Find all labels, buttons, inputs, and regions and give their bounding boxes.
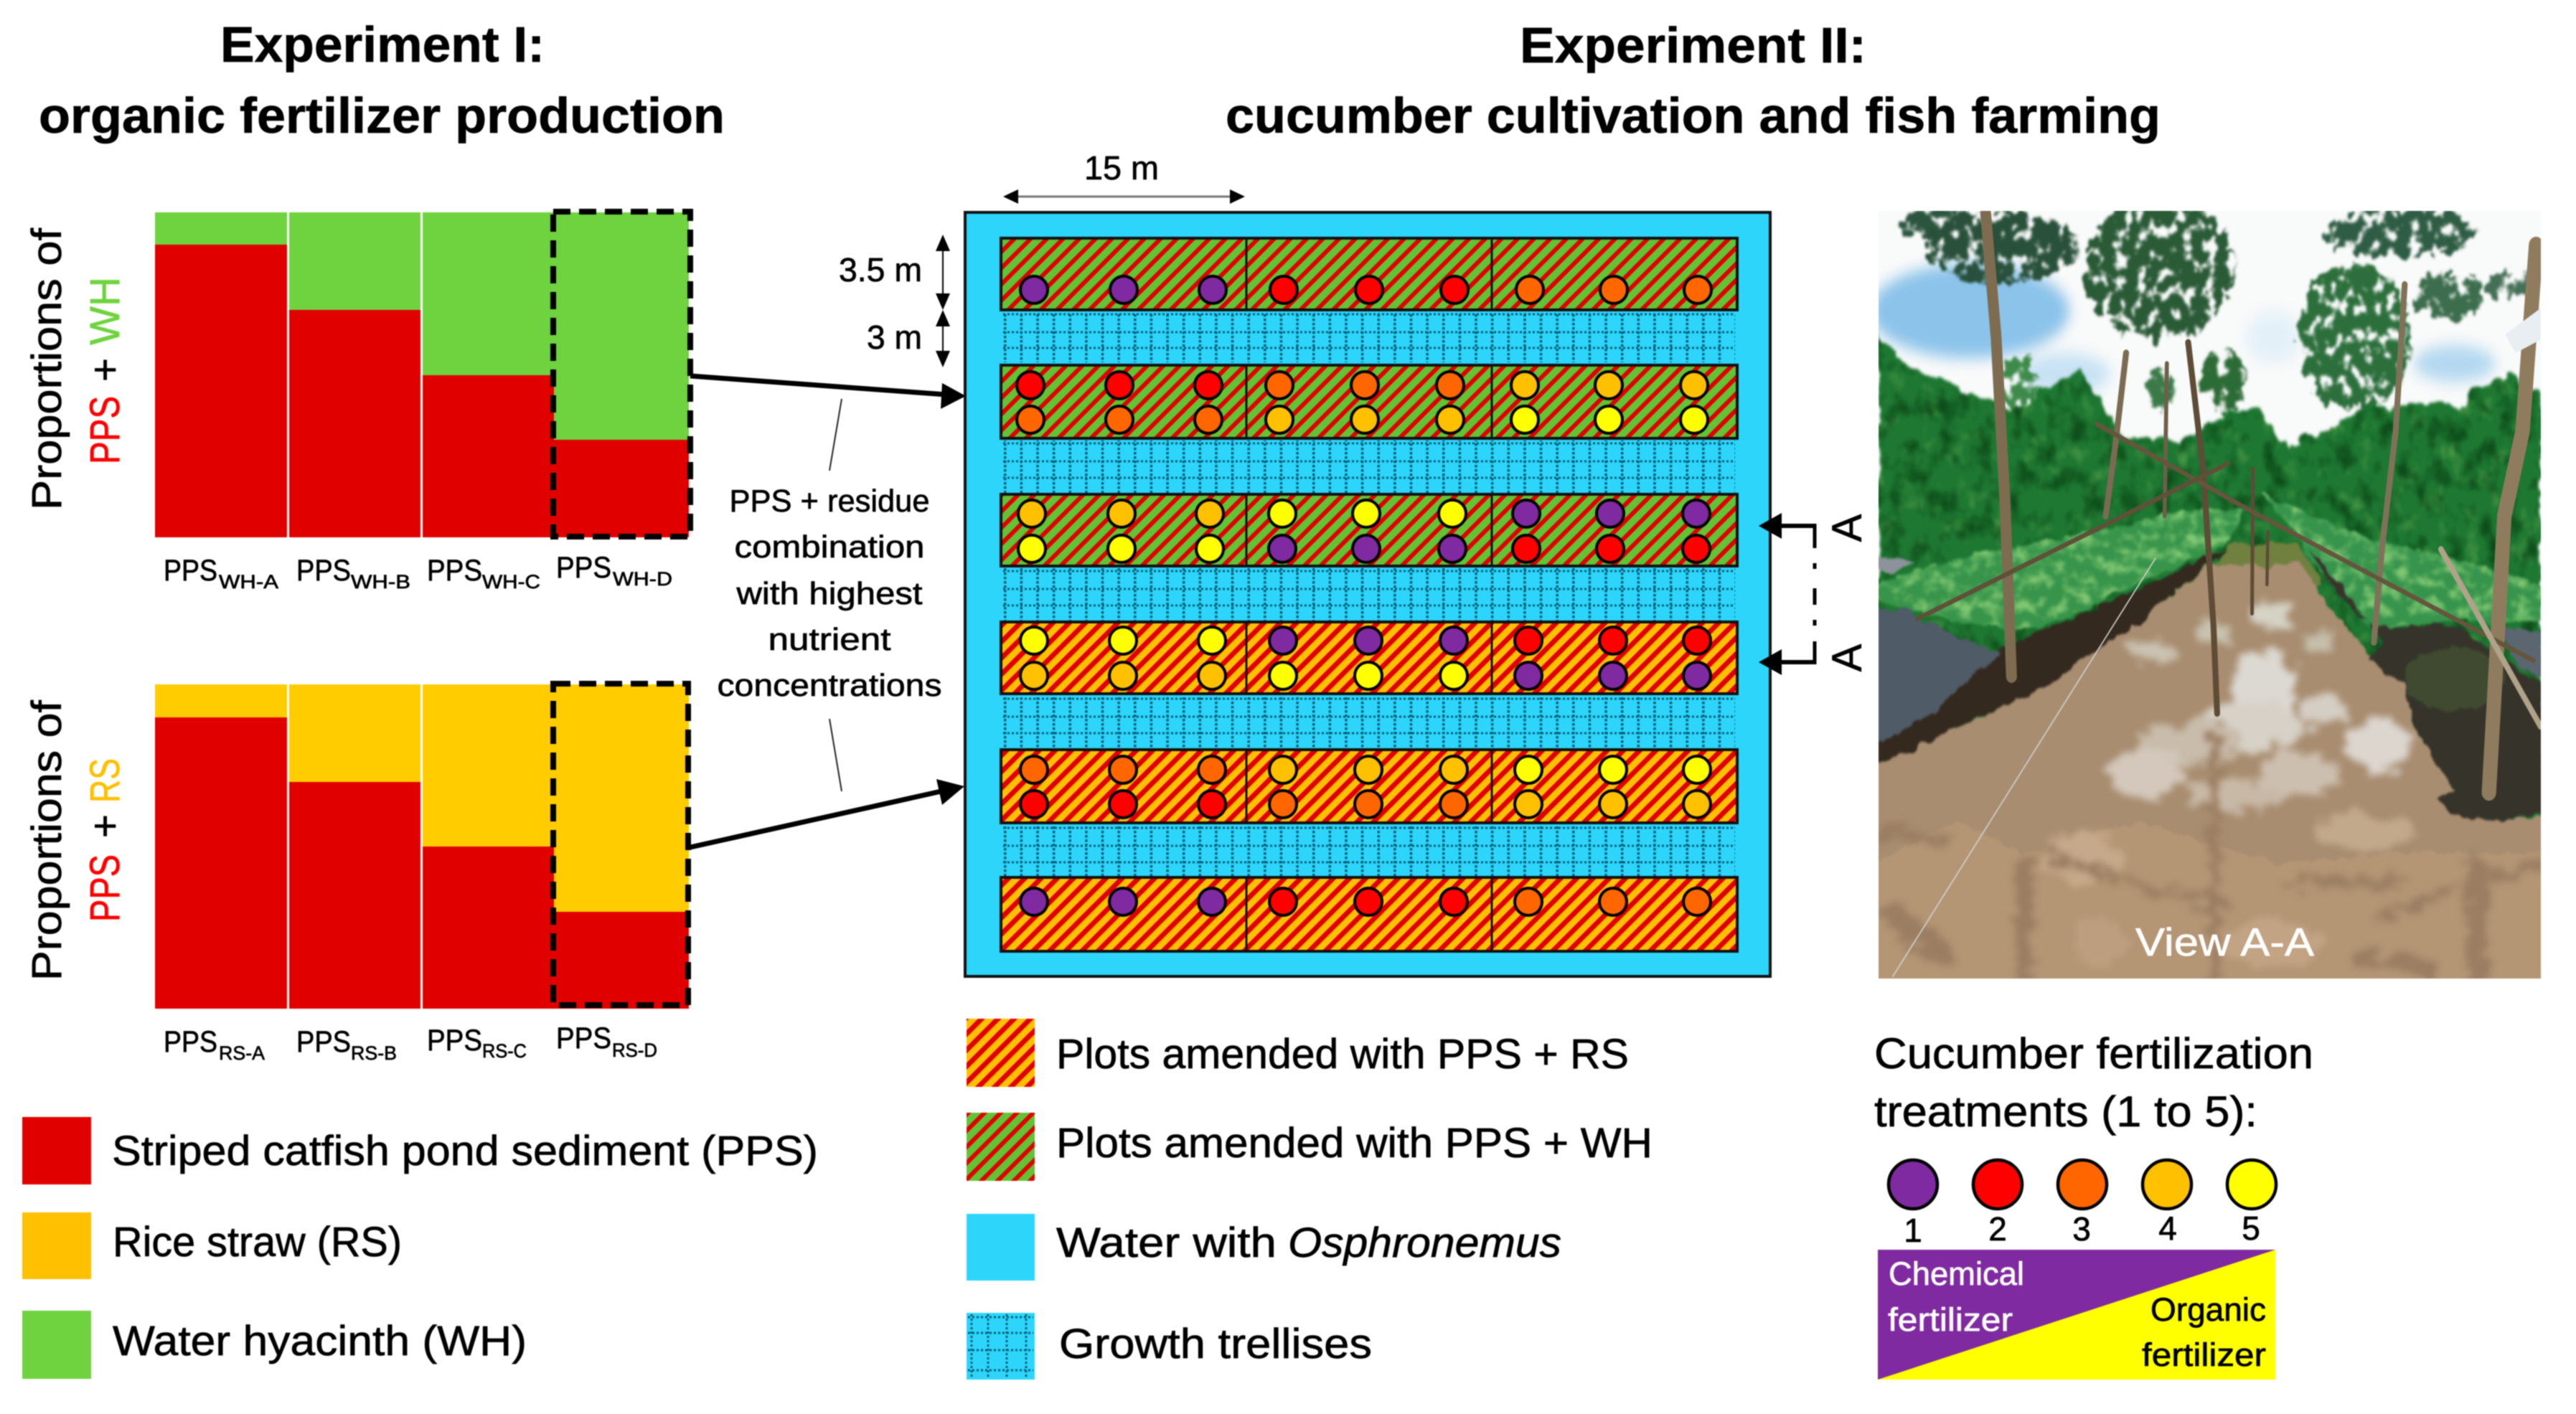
section marker: A-A: A — [1824, 644, 1871, 671]
axis label: proportions of PPS + WH: WH — [82, 277, 128, 345]
heading: cucumber fertilization treatments: treatments (1 to 5): — [1874, 1088, 2257, 1136]
legend: plots and water: Plots amended with PPS + WH — [1056, 1120, 1653, 1166]
chart labels: RS mixtures: RS-B — [351, 1042, 397, 1064]
chart: PPS + WH proportions — [155, 212, 690, 537]
dimension: 15 m: 15 m — [1084, 149, 1159, 187]
chart labels: WH mixtures — [164, 550, 672, 593]
plot row 2: PPS + WH — [1001, 365, 1737, 438]
sign on tree — [2505, 308, 2541, 353]
chart labels: RS mixtures: PPS — [164, 1024, 217, 1058]
legend: plots and water: Osphronemus — [1288, 1220, 1561, 1266]
black plastic — [1875, 608, 2001, 745]
legend: plots and water: Water with — [1056, 1220, 1277, 1266]
plot row 6: PPS + RS — [1001, 877, 1737, 951]
callout: best residue combination: with highest — [735, 576, 923, 611]
gradient bar: chemical to organic fertilizer: Organic — [2150, 1291, 2266, 1328]
pond water — [965, 212, 1770, 976]
dimension: plot width 3.5 m — [839, 235, 950, 310]
legend: plots and water: Growth trellises — [1059, 1321, 1372, 1367]
water reflections — [1879, 603, 2541, 978]
callout: best residue combination — [718, 399, 941, 791]
chart labels: RS mixtures — [164, 1021, 657, 1064]
chart labels: WH mixtures: PPS — [556, 550, 611, 584]
gradient bar: chemical to organic fertilizer: fertilizer — [2142, 1337, 2266, 1373]
callout: best residue combination: concentrations — [718, 668, 941, 703]
chart labels: RS mixtures: RS-D — [612, 1040, 657, 1061]
chart labels: RS mixtures: PPS — [296, 1024, 351, 1058]
section marker: A-A — [1759, 513, 1871, 675]
heading: cucumber fertilization treatments: Cucumber fertilization — [1874, 1029, 2313, 1078]
legend: plots and water: Plots amended with PPS + RS — [1056, 1031, 1629, 1078]
chart labels: WH mixtures: PPS — [427, 553, 482, 587]
legend: residues — [22, 1117, 818, 1379]
dimension: plot width 3.5 m: 3.5 m — [839, 251, 922, 288]
dimension: gap width 3 m — [867, 310, 950, 367]
trunks — [1985, 214, 2011, 677]
photo: view A-A of the canal — [1870, 198, 2545, 984]
plot row 4: PPS + RS — [1001, 622, 1737, 694]
legend: treatment circles 1 to 5: 3 — [2072, 1210, 2091, 1248]
title: Experiment I — [39, 17, 725, 143]
tree canopies — [1897, 198, 2532, 413]
water — [1878, 560, 2542, 868]
chart labels: WH mixtures: WH-A — [219, 571, 278, 593]
legend: residues: Water hyacinth (WH) — [113, 1318, 527, 1364]
axis label: proportions of PPS + WH: PPS — [82, 396, 128, 464]
chart labels: RS mixtures: PPS — [556, 1021, 611, 1055]
arrow: PPS + RS to RS plots — [690, 779, 964, 847]
axis label: proportions of PPS + RS: + — [82, 814, 128, 838]
chart labels: WH mixtures: WH-B — [351, 571, 410, 593]
legend: treatment circles 1 to 5: 1 — [1904, 1212, 1922, 1249]
title: Experiment I: organic fertilizer production — [39, 88, 725, 143]
axis label: proportions of PPS + RS — [24, 699, 128, 981]
plot row 3: PPS + WH — [1001, 494, 1737, 566]
legend: residues: Striped catfish pond sediment (PPS) — [112, 1128, 818, 1174]
axis label: proportions of PPS + RS: Proportions of — [24, 699, 70, 981]
section marker: A-A: A — [1824, 514, 1871, 542]
chart labels: WH mixtures: PPS — [164, 553, 217, 587]
dimension: 15 m — [1003, 149, 1245, 204]
callout: best residue combination: PPS + residue — [729, 484, 930, 519]
legend: residues: Rice straw (RS) — [113, 1219, 402, 1265]
gradient bar: chemical to organic fertilizer: fertilizer — [1888, 1301, 2013, 1338]
dimension: gap width 3 m: 3 m — [867, 319, 922, 356]
axis label: proportions of PPS + RS: RS — [82, 758, 128, 803]
heading: cucumber fertilization treatments — [1874, 1029, 2313, 1136]
chart: PPS + RS proportions — [155, 684, 689, 1009]
axis label: proportions of PPS + RS: PPS — [82, 854, 128, 922]
gradient bar: chemical to organic fertilizer: Chemical — [1889, 1255, 2024, 1292]
legend: treatment circles 1 to 5 — [1889, 1160, 2276, 1249]
title: Experiment II: cucumber cultivation and fish farming — [1226, 88, 2161, 143]
cucumber leaves — [1879, 495, 2541, 632]
title: Experiment II: Experiment II: — [1520, 17, 1866, 73]
chart labels: RS mixtures: RS-C — [482, 1040, 527, 1062]
axis label: proportions of PPS + WH: Proportions of — [24, 227, 70, 510]
chart labels: WH mixtures: WH-C — [482, 571, 540, 593]
diagram: experimental pond layout — [965, 212, 1770, 976]
axis label: proportions of PPS + WH: + — [82, 358, 128, 382]
plot row 1: PPS + WH — [1001, 238, 1737, 310]
legend: treatment circles 1 to 5: 5 — [2242, 1210, 2260, 1247]
chart labels: WH mixtures: WH-D — [613, 568, 672, 590]
gradient bar: chemical to organic fertilizer — [1878, 1250, 2275, 1380]
title: Experiment I: Experiment I: — [220, 17, 545, 72]
callout: best residue combination: nutrient — [768, 622, 891, 657]
axis label: proportions of PPS + WH — [24, 227, 128, 510]
shrubs band — [1879, 326, 2541, 863]
chart labels: RS mixtures: RS-A — [219, 1042, 265, 1064]
legend: treatment circles 1 to 5: 2 — [1988, 1210, 2007, 1248]
legend: treatment circles 1 to 5: 4 — [2158, 1210, 2177, 1247]
growth trellis strips — [1003, 313, 1735, 876]
photo caption: View A-A: View A-A — [2135, 920, 2314, 964]
arrow: PPS + WH to WH plots — [690, 376, 966, 409]
plot row 5: PPS + RS — [1001, 750, 1737, 823]
title: Experiment II — [1226, 17, 2161, 143]
legend: plots and water — [967, 1019, 1653, 1380]
chart labels: WH mixtures: PPS — [296, 553, 351, 587]
callout: best residue combination: combination — [735, 529, 924, 565]
far end water — [2214, 539, 2322, 587]
banks — [1875, 547, 2228, 766]
chart labels: RS mixtures: PPS — [427, 1023, 482, 1057]
poles — [2097, 424, 2534, 661]
